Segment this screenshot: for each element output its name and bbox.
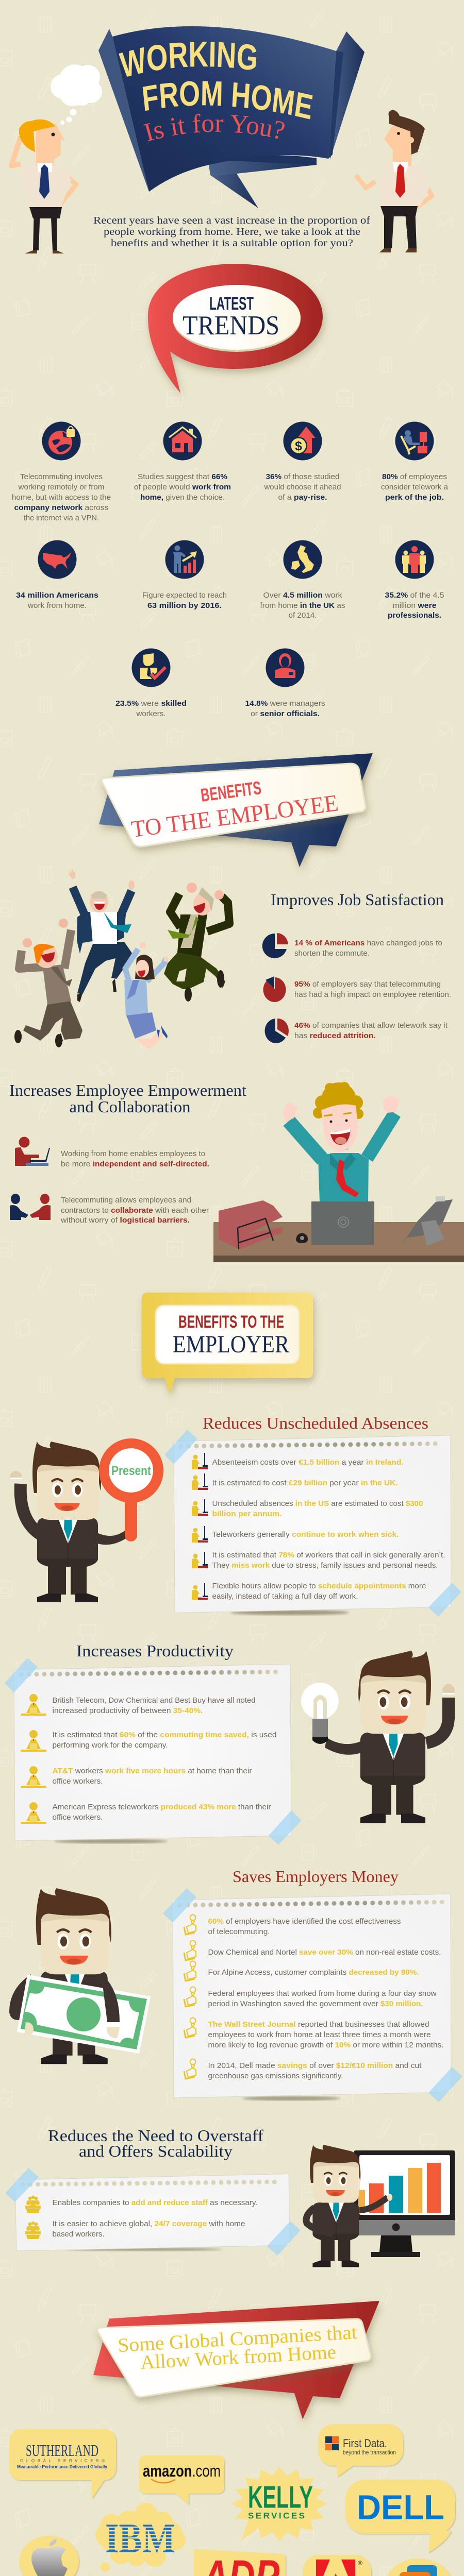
stat text: 63 million: [142, 591, 227, 610]
character holding dollar bill: [9, 1888, 151, 2064]
stat text: telecommuting: working remotely or from: [18, 483, 105, 492]
stat text: uk 4.5 million: [260, 591, 345, 620]
savings list text: 60% of employers have identified the cost effectiveness: [208, 1917, 401, 1926]
absences list text: It is estimated to cost £29 billion per year in the UK.: [212, 1479, 398, 1487]
stat text: uk 4.5 million: of 2014.: [289, 611, 317, 620]
productivity list text: office workers.: [53, 1777, 103, 1786]
absences list text: Teleworkers generally continue to work when sick.: [212, 1530, 399, 1539]
stat text: telecommuting: company network across: [14, 503, 108, 512]
hero title banner: [98, 26, 364, 208]
stat text: 36%: of a pay-rise.: [278, 493, 327, 502]
stat text: 95% of employers: [294, 980, 451, 999]
stat text: telecommuting: [12, 472, 111, 522]
text: collaborate: contractors to collaborate with each other: [61, 1206, 209, 1215]
logo bubble: amazon: amazon.com: [143, 2462, 221, 2480]
text: collaborate: without worry of logistical barriers.: [60, 1216, 190, 1225]
savings list text: In 2014, Dell made savings of over $12/€10 million and cut: [208, 2061, 422, 2070]
logo bubble: sutherland: Measurable Performance Delivered Globally: [17, 2464, 107, 2469]
stat icon: house: [163, 421, 202, 461]
heading: increases productivity: Increases Productivity: [76, 1641, 234, 1660]
logo bubble: dell: [345, 2480, 455, 2553]
stat text: 80%: perk of the job.: [385, 493, 444, 502]
logo bubble: amazon: [139, 2455, 224, 2504]
banner: some global companies: Some Global Companies that: [117, 2321, 358, 2357]
heading: reduces the need to overstaff: [48, 2126, 263, 2160]
logo bubble: first data: First Data.: [343, 2437, 387, 2450]
text: independent and self-directed: Working from home enables employees to: [61, 1149, 205, 1158]
badge: benefits to the employer: [142, 1293, 313, 1394]
stat text: 66%: Studies suggest that 66%: [138, 472, 227, 481]
stat icon: coin and arrow: $: [295, 439, 302, 453]
logo bubble: adobe: ®: [358, 2560, 362, 2567]
character presenting chart: [306, 2145, 392, 2267]
stat text: telecommuting: home, but with access to the: [12, 493, 111, 502]
pie chart: 14%: [262, 933, 288, 958]
stat text: 14% of americans: 14 % of Americans have changed jobs to: [294, 939, 442, 947]
stat text: 80%: [381, 472, 449, 502]
badge: benefits to the employer: EMPLOYER: [173, 1331, 289, 1358]
character holding present sign: [10, 1438, 163, 1602]
right man talking: [356, 110, 432, 252]
intro text: benefits and whether it is a suitable option for you?: [111, 238, 353, 249]
stat icon: skilled worker: [132, 648, 170, 687]
scalability list text: [53, 2198, 258, 2239]
absences list text: It is estimated that 78% of workers that call in sick generally aren’t.: [212, 1551, 445, 1560]
productivity list text: performing work for the company.: [53, 1741, 168, 1750]
logo bubble: kelly services: KELLY: [248, 2480, 313, 2514]
thought cloud: [51, 64, 102, 125]
stat text: 46% of companies: has reduced attrition.: [294, 1031, 376, 1040]
logo bubble: dell: DELL: [357, 2488, 444, 2527]
stat icon: three figures: [395, 540, 434, 579]
savings list text: [208, 1917, 443, 2080]
text: collaborate: [60, 1196, 209, 1225]
stat icon: manager: [266, 648, 304, 687]
stat icon: globe and lock: [42, 421, 80, 461]
logo bubble: adobe: [303, 2555, 371, 2576]
illustration: cheering man at desk: [213, 1082, 464, 1262]
logo bubble: ibm: IBM: [105, 2515, 175, 2562]
stat text: 34 million: 34 million Americans: [16, 591, 98, 600]
productivity list text: office workers.: [53, 1813, 103, 1822]
grey suited man: [14, 919, 82, 1047]
icon: handshake: [10, 1194, 51, 1220]
stat text: telecommuting: Telecommuting involves: [20, 472, 103, 481]
badge: benefits to the employer: BENEFITS TO THE: [178, 1312, 284, 1332]
text: independent and self-directed: [61, 1149, 209, 1168]
savings list text: The Wall Street Journal reported that businesses that allowed: [208, 2020, 429, 2029]
logo bubble: kelly services: SERVICES: [248, 2511, 305, 2520]
savings list text: greenhouse gas emissions significantly.: [208, 2072, 343, 2080]
subtitle: is it for you: [143, 113, 285, 141]
productivity list text: American Express teleworkers produced 43% more than their: [53, 1803, 271, 1811]
stat text: uk 4.5 million: from home in the UK as: [260, 601, 345, 610]
stat text: 36%: would choose it ahead: [264, 483, 341, 492]
stat icon: coin and arrow: [284, 421, 322, 461]
stat text: uk 4.5 million: Over 4.5 million work: [263, 591, 342, 600]
stat text: 95% of employers: 95% of employers say that telecommuting: [294, 980, 441, 989]
stat text: 46% of companies: 46% of companies that allow telework say it: [294, 1021, 448, 1030]
stat text: 14% of americans: [294, 939, 442, 958]
logo bubble: ibm: [88, 2503, 186, 2576]
logo bubble: kelly services: [231, 2467, 327, 2541]
absences list icons: [192, 1453, 208, 1600]
stat text: 66%: of people would work from: [134, 483, 231, 492]
badge: latest trends: LATEST: [209, 294, 254, 314]
intro text: Recent years have seen a vast increase in the proportion of: [93, 215, 370, 226]
stat text: 63 million: Figure expected to reach: [142, 591, 227, 600]
logo bubble: first data: beyond the transaction: [343, 2449, 396, 2456]
badge: latest trends: [148, 264, 323, 393]
navy suited man: [68, 868, 135, 1002]
stat text: 34 million: [16, 591, 98, 610]
stat text: 14.8%: 14.8% were managers: [245, 699, 325, 708]
panel: unscheduled absences note: [164, 1430, 461, 1617]
intro text: [93, 215, 370, 249]
panel: scalability note: [5, 2168, 301, 2256]
stat text: 35.2%: [385, 591, 444, 620]
productivity list text: increased productivity of between 35-40%.: [53, 1706, 203, 1715]
stat icon: uk map: [284, 540, 322, 579]
heading: reduces unscheduled absences: Reduces Unscheduled Absences: [203, 1414, 428, 1432]
pie chart: 46%: [265, 1019, 289, 1043]
productivity list text: [53, 1696, 276, 1822]
logo bubble: sutherland: [9, 2429, 116, 2499]
text: independent and self-directed: be more independent and self-directed.: [61, 1160, 209, 1168]
heading: reduces the need to overstaff: and Offers Scalability: [79, 2142, 233, 2160]
scalability list text: Enables companies to add and reduce staff as necessary.: [53, 2198, 258, 2207]
stat icon: desk worker: [395, 421, 434, 461]
savings list text: Dow Chemical and Nortel save over 30% on non-real estate costs.: [208, 1948, 441, 1957]
intro text: people working from home. Here, we take a look at the: [104, 226, 360, 238]
logo bubble: sutherland: GLOBAL SERVICES®: [20, 2459, 105, 2463]
panel: savings note: [163, 1888, 462, 2102]
savings list text: employees to work from home at least three times a month were: [208, 2030, 431, 2039]
stat text: 36%: [264, 472, 341, 502]
stat text: telecommuting: the internet via a VPN.: [24, 514, 99, 522]
productivity list text: British Telecom, Dow Chemical and Best Buy have all noted: [53, 1696, 256, 1705]
heading: increases employee empowerment: Increases Employee Empowerment: [9, 1081, 246, 1099]
stat text: 80%: 80% of employees: [382, 472, 447, 481]
banner: benefits to the employee: BENEFITS: [200, 777, 262, 806]
heading: saves employers money: Saves Employers Money: [233, 1867, 399, 1886]
heading: increases employee empowerment: [9, 1081, 246, 1116]
character holding light bulb: [301, 1651, 455, 1823]
title: working from home: WORKING: [119, 41, 256, 77]
heading: reduces the need to overstaff: Reduces the Need to Overstaff: [48, 2126, 263, 2145]
stat text: 23.5%: [115, 699, 187, 718]
logo bubble: sutherland: SUTHERLAND: [26, 2441, 98, 2460]
absences list text: Absenteeism costs over €1.5 billion a year in Ireland.: [212, 1458, 403, 1467]
banner: benefits to the employee: [99, 753, 373, 867]
productivity list text: It is estimated that 60% of the commuting time saved, is used: [53, 1731, 276, 1739]
savings list text: period in Washington saved the government over $30 million.: [208, 1999, 423, 2008]
pie chart: 95%: [263, 976, 286, 1002]
logo bubble: first data: [318, 2424, 403, 2477]
stat text: 23.5%: workers.: [136, 709, 166, 718]
scalability list text: based workers.: [53, 2230, 104, 2239]
stat icon: usa map: [38, 540, 76, 579]
banner: benefits to the employee: TO THE EMPLOYEE: [130, 789, 340, 842]
savings list text: of telecommuting.: [208, 1927, 270, 1936]
text: collaborate: Telecommuting allows employees and: [61, 1196, 191, 1205]
stat text: 14% of americans: shorten the commute.: [294, 949, 370, 958]
title: working from home: [119, 41, 312, 120]
stat icon: presenter and chart: [165, 540, 204, 579]
logo bubble: apple: [19, 2536, 79, 2576]
stat text: 66%: home, given the choice.: [140, 493, 225, 502]
absences list text: Flexible hours allow people to schedule appointments more: [212, 1582, 426, 1590]
illustration: monitor bar chart: [354, 2150, 455, 2257]
subtitle: is it for you: Is it for You?: [143, 113, 285, 141]
illustration: jumping colleagues: [14, 868, 229, 1048]
green suited man: [164, 883, 229, 1002]
savings list text: For Alpine Access, customer complaints decreased by 90%.: [208, 1968, 419, 1977]
heading: increases employee empowerment: and Collaboration: [69, 1097, 191, 1116]
stat text: 14.8%: [245, 699, 325, 718]
banner: some global companies: Allow Work from Home: [140, 2341, 337, 2374]
stat text: 14.8%: or senior officials.: [251, 709, 320, 718]
stat text: 66%: [134, 472, 231, 502]
stat text: 23.5%: 23.5% were skilled: [115, 699, 187, 708]
stat text: 63 million: 63 million by 2016.: [147, 601, 222, 610]
savings list text: more likely to log revenue growth of 10% or more within 12 months.: [208, 2041, 443, 2049]
stat text: 35.2%: million were: [393, 601, 436, 610]
stat text: 35.2%: 35.2% of the 4.5: [385, 591, 444, 600]
panel: productivity note: [5, 1658, 302, 1845]
scalability list icons: [25, 2196, 41, 2239]
absences list text: easily, instead of taking a full day off work.: [212, 1592, 358, 1601]
absences list text: billion per annum.: [212, 1510, 281, 1518]
stat text: 34 million: work from home.: [27, 601, 87, 610]
savings list text: Federal employees that worked from home during a four day snow: [208, 1989, 437, 1998]
scalability list text: It is easier to achieve global, 24/7 coverage with home: [53, 2219, 245, 2228]
logo bubble: vmware: [384, 2558, 454, 2576]
title: working from home: FROM HOME: [142, 81, 312, 120]
stat text: 46% of companies: [294, 1021, 448, 1040]
character holding present sign: Present: [111, 1464, 152, 1478]
stat text: 95% of employers: has had a high impact on employee retention.: [294, 990, 451, 999]
productivity list icons: [21, 1694, 46, 1823]
stat text: 36%: 36% of those studied: [266, 472, 339, 481]
absences list text: Unscheduled absences in the US are estimated to cost $300: [212, 1499, 423, 1508]
left man scratching head: [11, 120, 76, 253]
banner: some global companies: [93, 2301, 379, 2419]
productivity list text: AT&T workers work five more hours at home than their: [53, 1767, 252, 1775]
stat text: 80%: consider telework a: [381, 483, 449, 492]
stat text: 35.2%: professionals.: [388, 611, 441, 620]
woman in blue: [124, 942, 169, 1048]
savings list icons: [184, 1914, 196, 2079]
absences list text: [212, 1458, 445, 1601]
absences list text: They miss work due to stress, family issues and personal needs.: [212, 1561, 438, 1570]
heading: improves job satisfaction: Improves Job Satisfaction: [271, 890, 444, 909]
badge: latest trends: TRENDS: [183, 311, 279, 341]
icon: person at laptop: [15, 1137, 50, 1166]
